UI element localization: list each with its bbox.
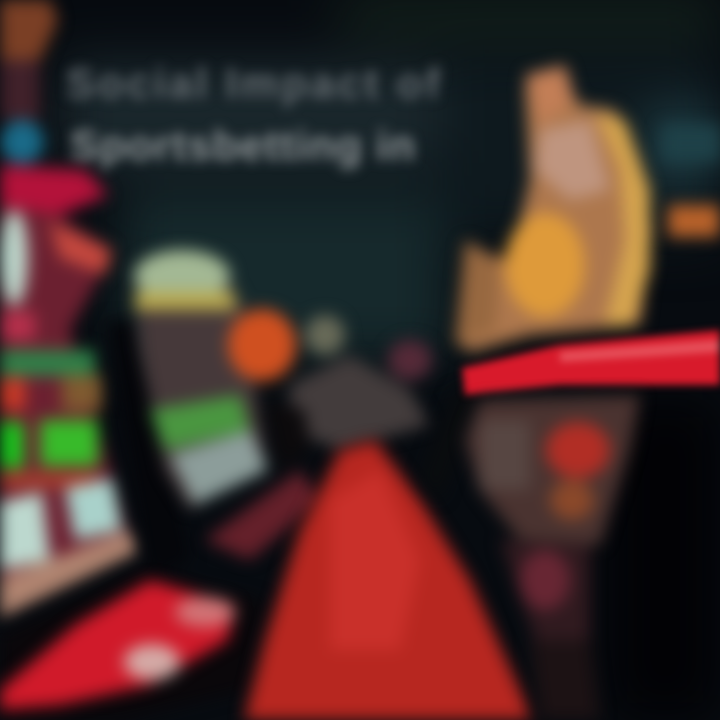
heading: Sportsbetting in <box>70 122 415 170</box>
dark divider post <box>420 390 480 500</box>
red band <box>462 330 720 395</box>
red base <box>0 580 235 710</box>
lower right machine panel <box>465 395 640 720</box>
heading: Social Impact of <box>66 60 441 108</box>
orange side accent <box>662 125 720 237</box>
black pillar <box>0 320 262 720</box>
right figure: golden shape <box>455 65 652 352</box>
heading <box>66 60 441 170</box>
center machine <box>134 250 432 560</box>
red cloth <box>244 440 532 720</box>
left slot machine <box>0 0 138 618</box>
